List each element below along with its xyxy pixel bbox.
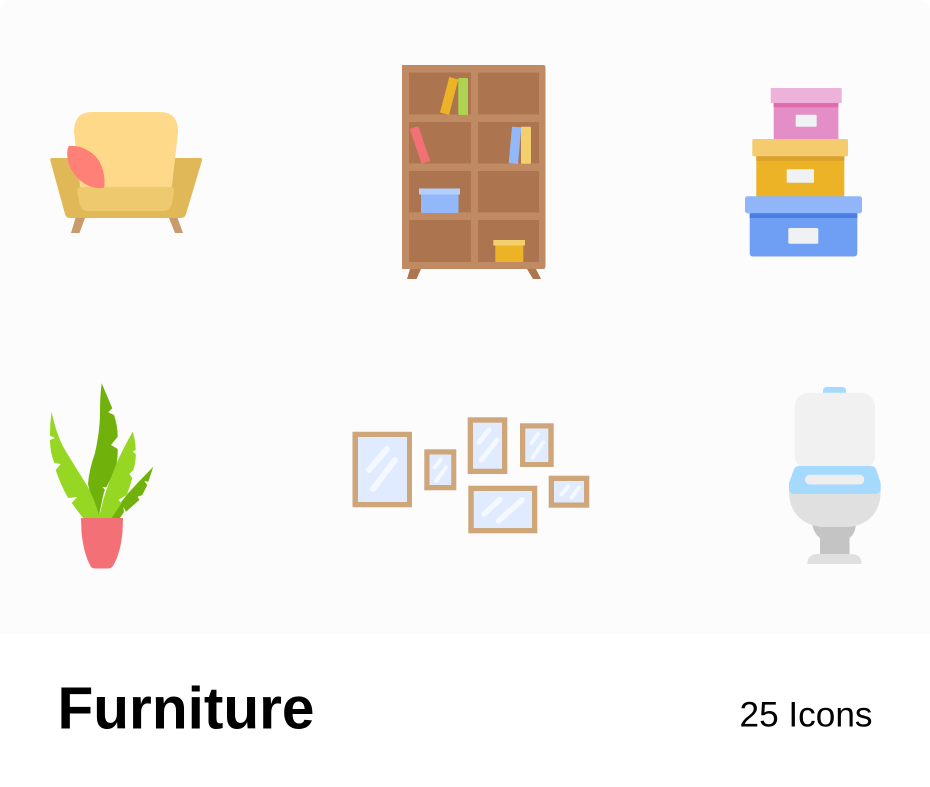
- orange book: [440, 77, 458, 115]
- yellow storage box: [493, 240, 525, 262]
- plant dark centre leaf: [88, 383, 118, 515]
- icon: potted plant: [50, 383, 153, 568]
- toilet seat slot: [805, 475, 864, 484]
- icon: stacked boxes: [745, 88, 862, 256]
- frame 4: [520, 423, 554, 467]
- pink box: [771, 88, 842, 139]
- frame 5: [468, 486, 537, 533]
- frame 3: [468, 417, 507, 474]
- icon: armchair: [50, 112, 202, 233]
- icon: picture frames: [352, 417, 589, 533]
- blue book: [509, 127, 521, 164]
- armchair pillow: [67, 146, 105, 188]
- toilet flush button: [823, 387, 846, 394]
- bookcase shelves: [409, 72, 539, 262]
- plant light right leaf: [95, 432, 136, 518]
- yellow box: [752, 139, 848, 196]
- toilet bowl: [789, 488, 881, 527]
- armchair back: [74, 112, 178, 190]
- frame 1: [352, 432, 412, 507]
- armchair seat cushion: [77, 187, 174, 211]
- title: Furniture: [58, 676, 314, 742]
- toilet tank: [795, 393, 875, 470]
- plant dark right leaf: [112, 467, 153, 518]
- icon count: 25 Icons: [740, 696, 872, 734]
- yellow book: [521, 127, 531, 164]
- toilet neck: [812, 522, 856, 555]
- toilet seat: [789, 466, 881, 494]
- bookcase feet: [407, 269, 541, 279]
- armchair legs: [71, 218, 183, 233]
- plant small leaf notch: [102, 487, 108, 490]
- icon: bookcase: [402, 65, 546, 279]
- green book: [458, 78, 468, 115]
- toilet base: [807, 554, 862, 564]
- plant pot: [81, 518, 123, 568]
- icon: toilet: [789, 387, 881, 564]
- frame 2: [424, 449, 456, 490]
- blue storage box: [419, 188, 460, 213]
- blue box: [745, 196, 862, 256]
- plant light left leaf: [50, 412, 100, 518]
- red book: [410, 126, 430, 164]
- bookcase frame: [402, 65, 546, 269]
- frame 6: [549, 476, 589, 508]
- armchair arms and frame: [50, 158, 202, 218]
